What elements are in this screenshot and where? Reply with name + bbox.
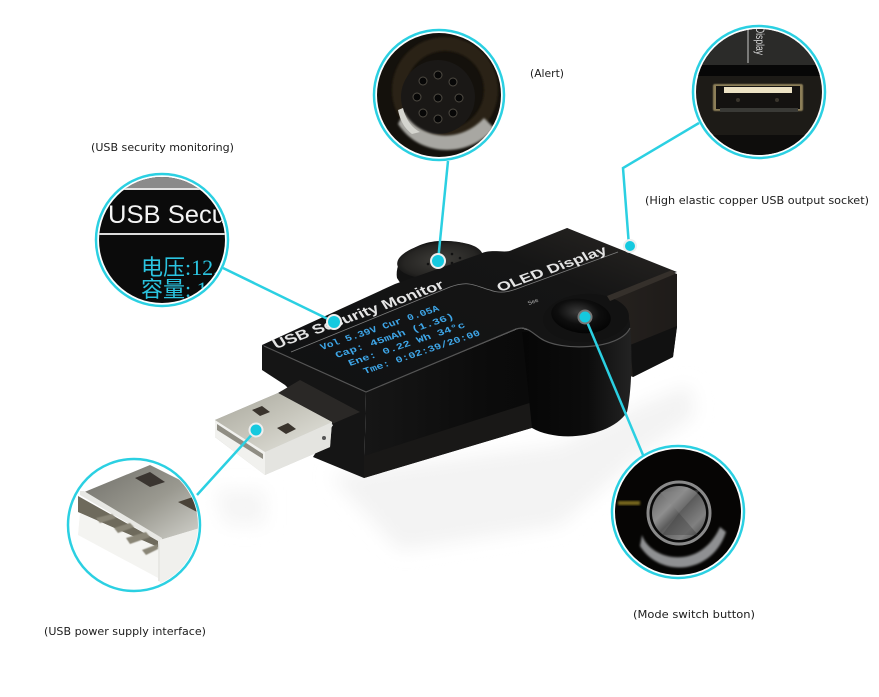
callout: alert — [374, 30, 505, 269]
OLED readout: Ene: 0.22 Wh 34°c — [346, 320, 468, 369]
lower black section of socket end — [630, 326, 677, 377]
zoom lens: alert speaker — [374, 30, 505, 160]
glossy top edge highlight — [264, 328, 630, 392]
push button — [549, 295, 613, 337]
callout: USB plug — [68, 422, 264, 591]
leader line: plug — [197, 430, 256, 495]
USB plug shell — [215, 380, 360, 475]
floor reflection — [215, 385, 695, 550]
zoom lens: screen text: 容量: 1 — [141, 277, 208, 302]
OLED readout: Cap: 45mAh (1.36) — [333, 311, 456, 361]
left side face — [262, 345, 366, 478]
dot: alert — [430, 253, 446, 269]
callout: USB security monitoring — [95, 174, 342, 330]
leader line: monitoring — [223, 268, 334, 322]
callout: USB output socket — [623, 26, 825, 253]
zoom lens: socket: Display — [753, 27, 767, 55]
silk text: product name: USB Security Monitor — [270, 278, 448, 352]
leader line: socket — [623, 123, 699, 246]
engraved outline — [291, 252, 618, 352]
dot: socket — [623, 239, 637, 253]
speaker bump — [395, 238, 485, 298]
right translucent socket end — [560, 228, 677, 377]
label: USB security monitoring: (USB security monitoring) — [91, 141, 234, 154]
label: mode switch button: (Mode switch button) — [633, 608, 755, 621]
dot: monitoring — [326, 314, 342, 330]
zoom lens: socket — [693, 26, 825, 160]
OLED readout: Tme: 0:02:39/20:00 — [361, 328, 483, 377]
label: alert: (Alert) — [530, 67, 564, 80]
label: high elastic copper USB output socket: (High elastic copper USB output socket) — [645, 194, 869, 207]
leader line: button — [585, 317, 643, 455]
leader line: alert — [438, 161, 448, 261]
OLED readout: Vol 5.39V Cur 0.05A — [318, 303, 442, 353]
front face — [364, 328, 545, 478]
callout: mode switch — [578, 310, 744, 578]
zoom lens: button — [612, 446, 744, 578]
ring around button — [542, 292, 630, 344]
zoom lens: plug — [68, 459, 200, 591]
top face — [262, 228, 677, 392]
silk text: OLED Display: OLED Display — [494, 243, 610, 294]
button bump side — [522, 325, 631, 436]
silk text: See: See — [527, 298, 540, 307]
dot: button — [578, 310, 592, 324]
label: USB power supply interface: (USB power supply interface) — [44, 625, 206, 638]
zoom lens: screen text — [95, 174, 230, 306]
zoom lens: screen text: USB Secu — [108, 201, 226, 229]
OLED readout — [318, 303, 483, 377]
USB monitor device — [215, 228, 677, 478]
zoom lens: screen text: 电压:12.0 — [141, 255, 230, 280]
socket slit — [607, 270, 675, 301]
dot: plug — [248, 422, 264, 438]
